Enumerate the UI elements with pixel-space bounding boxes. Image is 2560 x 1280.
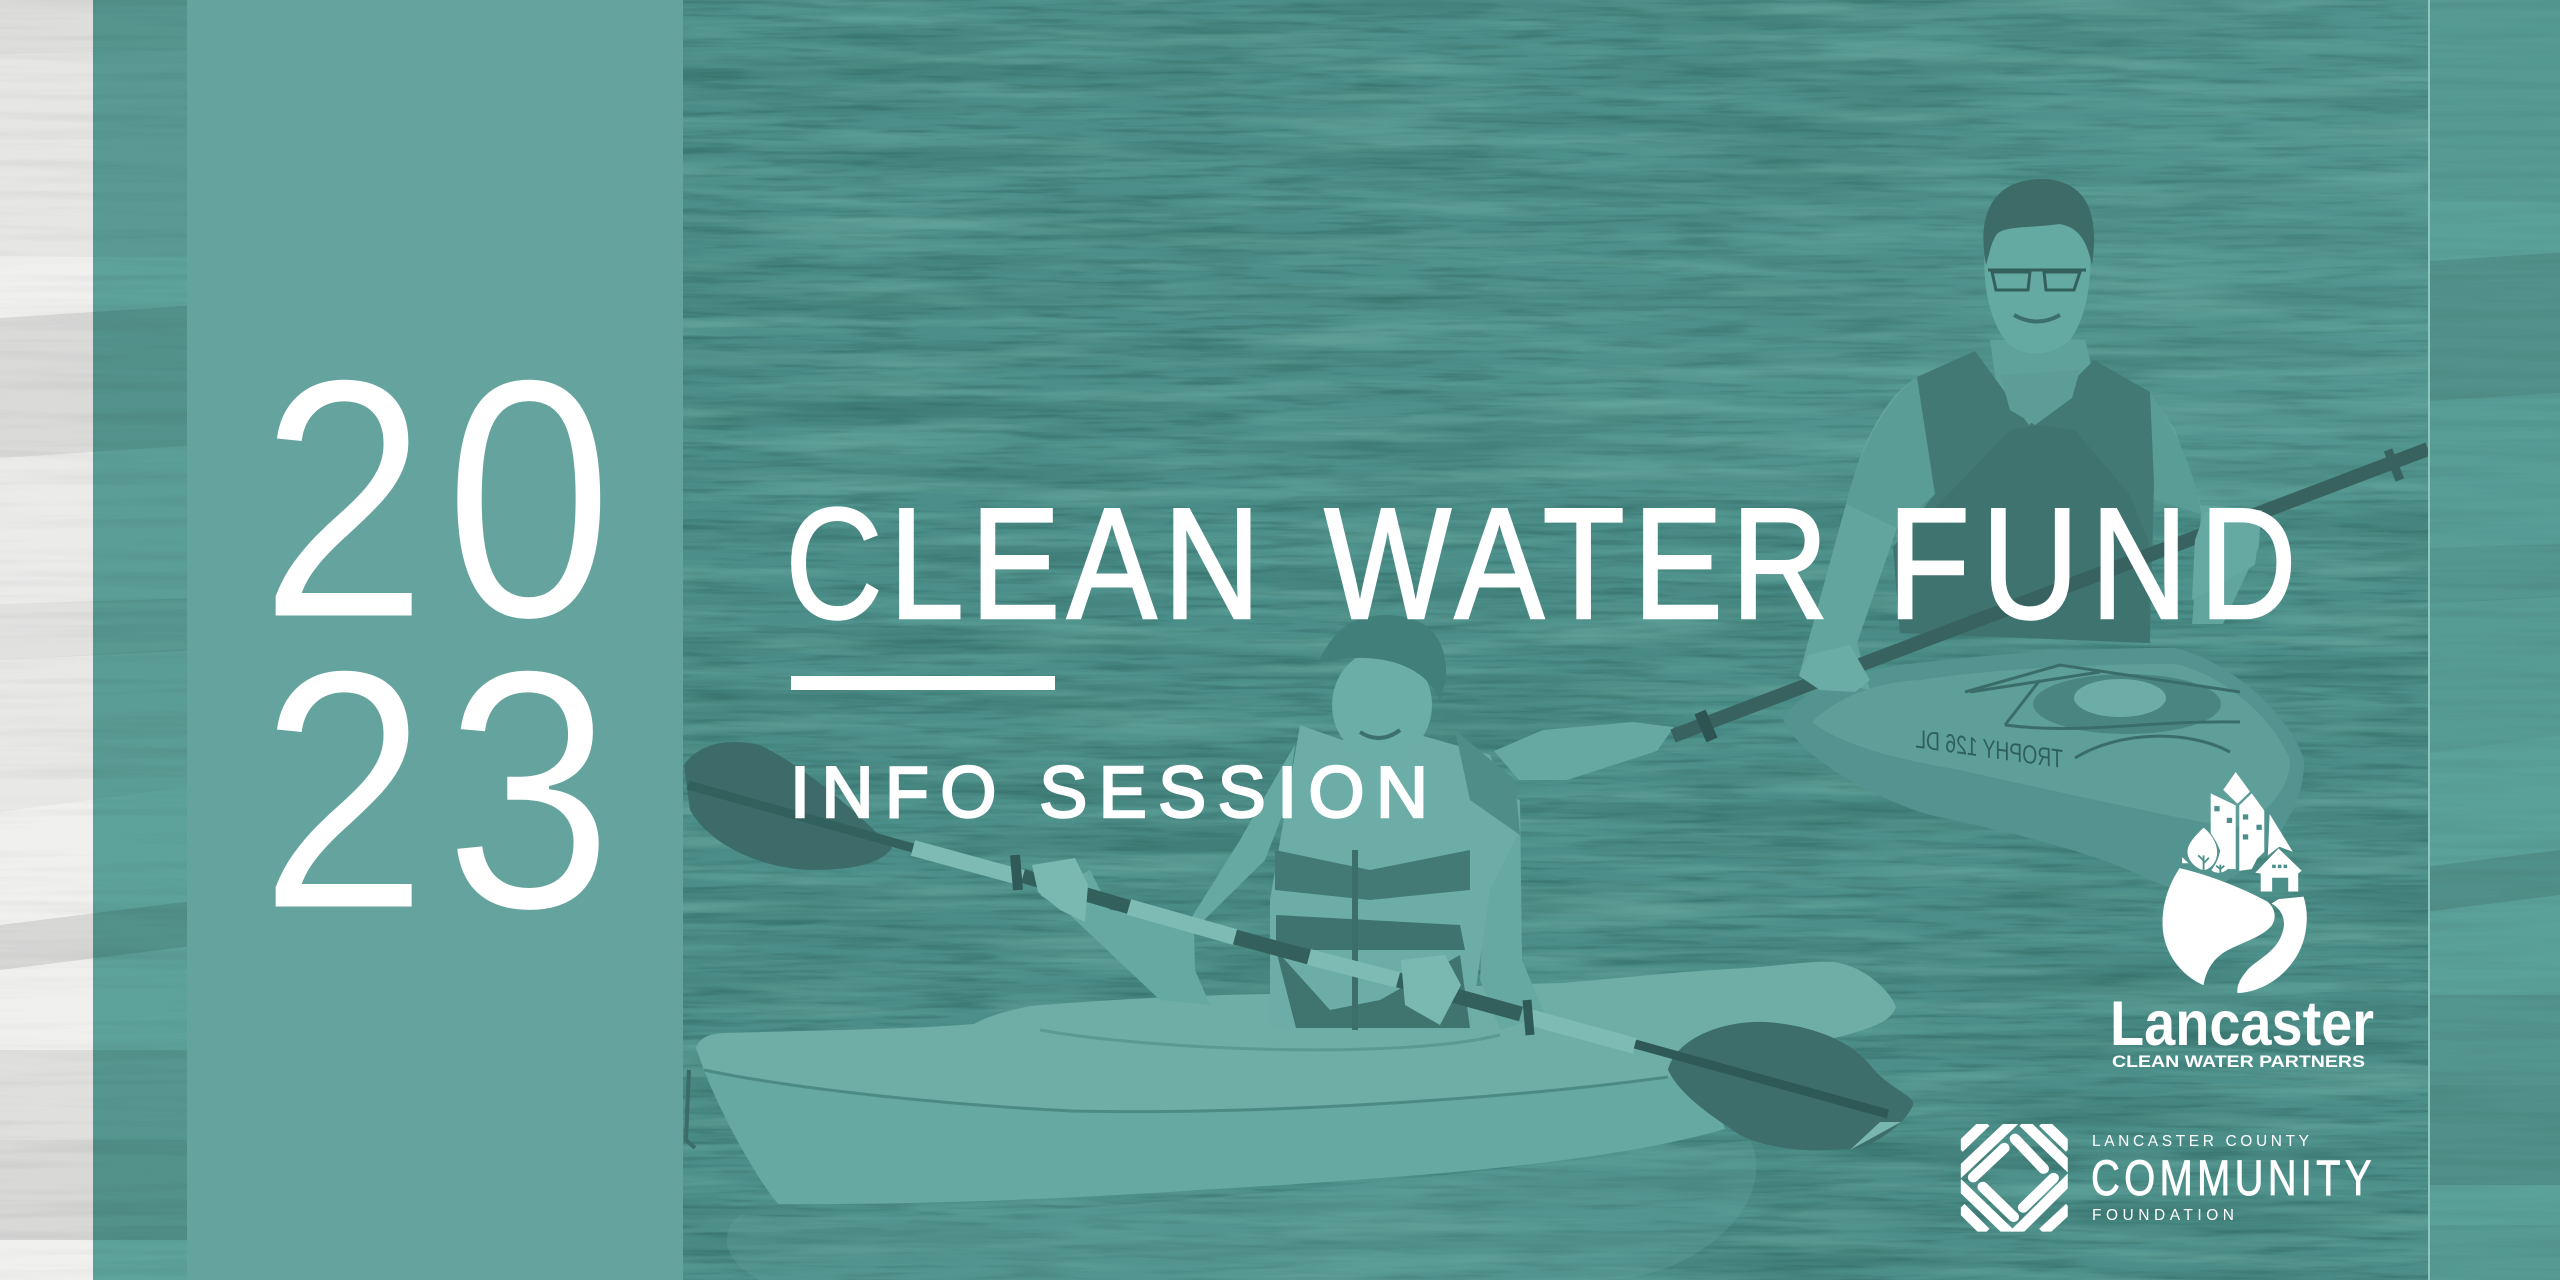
hair [1983, 179, 2094, 265]
life vest [1270, 725, 1492, 994]
man arms and shirt [1799, 379, 1914, 690]
panel: solid teal year column [187, 0, 683, 1280]
year: 20: 20 [259, 307, 613, 690]
logo wordmark: Lancaster [2110, 989, 2374, 1059]
head [1332, 658, 1432, 740]
subtitle: INFO SESSION [790, 753, 1428, 833]
year: 23: 23 [259, 598, 613, 981]
panel: teal tinted wood strip right [2428, 0, 2560, 1280]
title: CLEAN [785, 476, 1267, 652]
org line: Community: COMMUNITY [2091, 1150, 2376, 1206]
man in kayak [1494, 179, 2428, 780]
front kayak [686, 962, 1896, 1204]
woman in kayak [1040, 615, 1545, 1030]
glasses [1988, 270, 2086, 290]
org line: Foundation: FOUNDATION [2092, 1207, 2234, 1224]
title rule [791, 676, 1055, 690]
title: FUND [1888, 476, 2308, 652]
panel: wood texture strip left [0, 0, 93, 1280]
front paddle [684, 742, 1913, 1150]
panel: teal tinted wood strip [93, 0, 187, 1280]
smile [1360, 730, 1400, 738]
head [1984, 224, 2090, 340]
org line: Lancaster County: LANCASTER COUNTY [2092, 1133, 2309, 1150]
logo: Lancaster County Community Foundation [1957, 1121, 2376, 1234]
kayak hatch [2033, 674, 2221, 734]
title: WATER [1324, 476, 1837, 652]
smile [2014, 315, 2060, 322]
bungee cords [1965, 665, 2240, 758]
torso and arms [1040, 745, 1295, 1005]
water background [683, 0, 2428, 1280]
life vest [1893, 351, 2154, 643]
cap [1319, 615, 1446, 700]
icon: woven diamond [1957, 1121, 2071, 1234]
rear kayak [1783, 648, 2304, 891]
kayak lettering: TROPHY 126 DL [1914, 724, 2065, 774]
hands [1799, 658, 1870, 692]
paddle [1494, 449, 2428, 780]
hands on paddle [1032, 858, 1088, 922]
logo: Lancaster Clean Water Partners [2110, 772, 2374, 1071]
panel: kayak photo with teal duotone [683, 0, 2428, 1280]
logo tagline: CLEAN WATER PARTNERS [2112, 1052, 2365, 1071]
icon: water drop with city and river [2162, 772, 2307, 993]
